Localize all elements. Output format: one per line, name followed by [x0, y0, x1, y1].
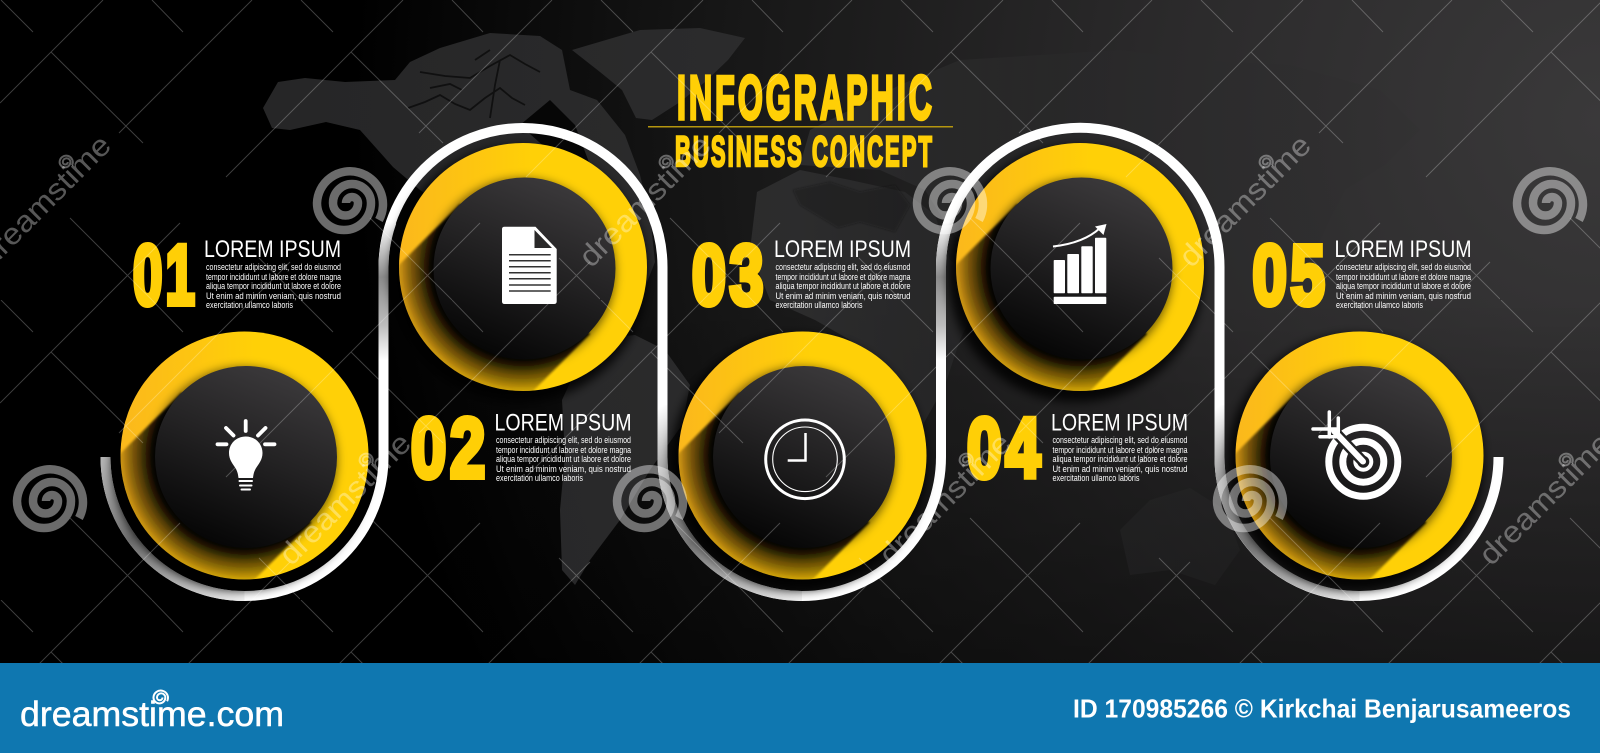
heading: LOREM IPSUM: [494, 410, 632, 436]
heading: LOREM IPSUM: [1334, 236, 1472, 263]
body copy: Ut enim ad minim veniam, quis nostrud: [1052, 464, 1188, 475]
body copy: tempor incididunt ut labore et dolore magna: [1336, 272, 1471, 283]
body copy: consectetur adipiscing elit, sed do eiusmod: [496, 435, 631, 446]
step 5 text: [1252, 228, 1472, 322]
body copy: consectetur adipiscing elit, sed do eiusmod: [1336, 262, 1471, 273]
footer logo: dreamstime.com: [20, 695, 284, 734]
title block: [648, 64, 953, 176]
north america: [263, 33, 655, 330]
africa: [750, 170, 985, 440]
body copy: aliqua tempor incididunt ut labore et dolore: [1336, 281, 1471, 292]
body copy: tempor incididunt ut labore et dolore magna: [776, 272, 911, 283]
title: infographic: INFOGRAPHIC: [677, 64, 935, 133]
number 01: 01: [133, 228, 198, 322]
footer band: [0, 663, 1600, 753]
step 2 circle: [310, 143, 647, 484]
step 3 circle: [590, 332, 926, 672]
body copy: consectetur adipiscing elit, sed do eiusmod: [206, 262, 341, 273]
heading: LOREM IPSUM: [1051, 410, 1188, 436]
body copy: exercitation ullamco laboris: [776, 300, 863, 311]
body copy: Ut enim ad minim veniam, quis nostrud: [1336, 291, 1471, 302]
step 5 circle: [1146, 332, 1484, 672]
heading: LOREM IPSUM: [774, 236, 911, 263]
body copy: tempor incididunt ut labore et dolore magna: [1052, 445, 1188, 456]
body copy: [1336, 262, 1471, 311]
step 1 circle: [32, 332, 368, 672]
body copy: tempor incididunt ut labore et dolore magna: [206, 272, 341, 283]
body copy: [206, 262, 341, 311]
icon: bar chart with arrow: [1053, 224, 1106, 304]
body copy: consectetur adipiscing elit, sed do eiusmod: [1052, 435, 1188, 446]
body copy: exercitation ullamco laboris: [1052, 473, 1140, 484]
body copy: [496, 435, 631, 484]
body copy: aliqua tempor incididunt ut labore et dolore: [496, 454, 631, 465]
icon: clock: [766, 420, 844, 499]
body copy: Ut enim ad minim veniam, quis nostrud: [776, 291, 910, 302]
watermark overlay: dreamstime: [1173, 129, 1318, 274]
body copy: Ut enim ad minim veniam, quis nostrud: [206, 291, 341, 302]
subtitle: business concept: BUSINESS CONCEPT: [675, 128, 934, 176]
map details: arctic channels and seas: [408, 50, 910, 232]
body copy: [776, 262, 911, 311]
number 05: 05: [1252, 228, 1328, 322]
body copy: aliqua tempor incididunt ut labore et dolore: [1052, 454, 1188, 465]
step 3 text: [692, 228, 911, 322]
greenland: [572, 28, 745, 120]
world map: [263, 28, 1420, 585]
body copy: exercitation ullamco laboris: [496, 473, 583, 484]
step 2 text: [411, 401, 632, 495]
watermark overlay: dreamstime: [273, 427, 418, 572]
icon: target with arrow: [1313, 412, 1398, 496]
body copy: consectetur adipiscing elit, sed do eiusmod: [776, 262, 910, 273]
footer credit: ID 170985266 © Kirkchai Benjarusameeros: [1073, 694, 1571, 724]
step 4 text: [967, 401, 1188, 495]
body copy: exercitation ullamco laboris: [206, 300, 293, 311]
icon: light bulb: [218, 421, 274, 490]
heading: LOREM IPSUM: [204, 236, 341, 263]
number 04: 04: [967, 401, 1044, 495]
number 03: 03: [692, 228, 767, 322]
eurasia: [800, 50, 1420, 340]
icon: document: [502, 227, 557, 304]
body copy: Ut enim ad minim veniam, quis nostrud: [496, 464, 631, 475]
body copy: tempor incididunt ut labore et dolore magna: [496, 445, 631, 456]
body copy: exercitation ullamco laboris: [1336, 300, 1423, 311]
watermark overlay: dreamstime: [573, 129, 718, 274]
body copy: [1052, 435, 1188, 484]
connecting line: [106, 128, 1498, 596]
divider: [648, 126, 953, 128]
watermark overlay: dreamstime: [873, 427, 1018, 572]
step 1 text: [133, 228, 341, 322]
body copy: aliqua tempor incididunt ut labore et dolore: [206, 281, 341, 292]
south america: [560, 335, 690, 585]
body copy: aliqua tempor incididunt ut labore et dolore: [776, 281, 910, 292]
australia: [1120, 488, 1240, 585]
step 4 circle: [867, 143, 1204, 484]
number 02: 02: [411, 401, 489, 495]
